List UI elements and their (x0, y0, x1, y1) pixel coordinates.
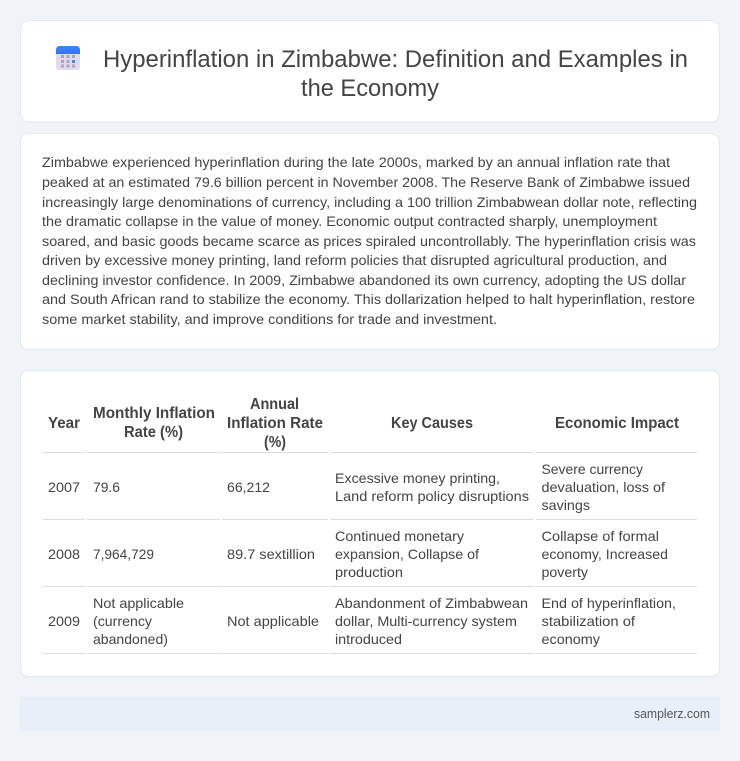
text block: description paragraph: peaked at an estimated 79.6 billion percent in November 2008. The Reserve Bank of Zimbabwe issued (42, 174, 690, 190)
table header row (48, 396, 680, 451)
table header row: Rate (%) (124, 424, 183, 441)
table row: 2007: 66,212 (227, 479, 270, 495)
table row: 2009: economy (542, 631, 600, 647)
table header row: Economic Impact (555, 415, 680, 432)
text block: description paragraph (42, 154, 697, 327)
table row: 2008: production (335, 564, 403, 580)
panel: title card (20, 20, 720, 122)
table header row: (%) (264, 434, 286, 451)
table row: 2007: 79.6 (93, 479, 120, 495)
table header row: Key Causes (391, 415, 473, 432)
table row: 2007: Severe currency (542, 461, 643, 477)
text block: description paragraph: and South African rand to stabilize the economy. This dollarization helped to halt hyperinflation, restore (42, 291, 695, 307)
footer: samplerz.com (634, 706, 710, 721)
panel: description (20, 134, 720, 350)
text block: description paragraph: soared, and basic goods became scarce as prices spiraled uncontrollably. The hyperinflation crisis was (42, 233, 696, 249)
table row: 2009: 2009 (48, 613, 80, 629)
table row: 2007: Excessive money printing, (335, 470, 500, 486)
table header row: Annual (250, 396, 299, 413)
table row: 2009: Abandonment of Zimbabwean (335, 595, 528, 611)
table row: 2008: Continued monetary (335, 528, 464, 544)
table row: 2007: devaluation, loss of (542, 479, 665, 495)
table row: 2008: 2008 (48, 546, 80, 562)
table row: 2007 (48, 461, 665, 513)
table row: 2009: stabilization of (542, 613, 635, 629)
title: Hyperinflation in Zimbabwe: Definition and Examples in (103, 46, 688, 73)
table row: 2008: 89.7 sextillion (227, 546, 315, 562)
table row: 2008: expansion, Collapse of (335, 546, 479, 562)
table row: 2008 (48, 528, 668, 580)
table row: 2008: economy, Increased (542, 546, 668, 562)
footer (20, 697, 720, 731)
table row: 2007: savings (542, 497, 590, 513)
text block: description paragraph: some market stability, and improve conditions for trade and investment. (42, 311, 497, 327)
icon: calendar (56, 46, 80, 70)
table row: 2009 (48, 595, 676, 647)
table row: 2007: Land reform policy disruptions (335, 488, 529, 504)
table row: 2007: 2007 (48, 479, 80, 495)
text block: description paragraph: declining investor confidence. In 2009, Zimbabwe abandoned its own currency, adopting the US dollar (42, 272, 686, 288)
table row: 2009: abandoned) (93, 631, 168, 647)
table row: 2008: 7,964,729 (93, 546, 154, 562)
table row: 2009: End of hyperinflation, (542, 595, 676, 611)
table row: 2009: introduced (335, 631, 402, 647)
table header row: Year (48, 415, 80, 432)
title: the Economy (301, 75, 439, 102)
text block: description paragraph: the dramatic collapse in the value of money. Economic output contracted sharply, unemployment (42, 213, 657, 229)
table row: 2009: Not applicable (93, 595, 184, 611)
title (103, 46, 688, 102)
table row: 2009: Not applicable (227, 613, 319, 629)
text block: description paragraph: driven by excessive money printing, land reform policies that disrupted agricultural production, and (42, 252, 667, 268)
panel: data table (20, 370, 720, 676)
text block: description paragraph: increasingly large denominations of currency, including a 100 trillion Zimbabwean dollar note, reflecting (42, 194, 697, 210)
table header row: Inflation Rate (227, 415, 323, 432)
table header row: Monthly Inflation (93, 405, 215, 422)
table row: 2009: dollar, Multi-currency system (335, 613, 517, 629)
table row: 2009: (currency (93, 613, 152, 629)
text block: description paragraph: Zimbabwe experienced hyperinflation during the late 2000s, marked by an annual inflation rate that (42, 154, 670, 170)
table row: 2008: Collapse of formal (542, 528, 659, 544)
table row: 2008: poverty (542, 564, 588, 580)
